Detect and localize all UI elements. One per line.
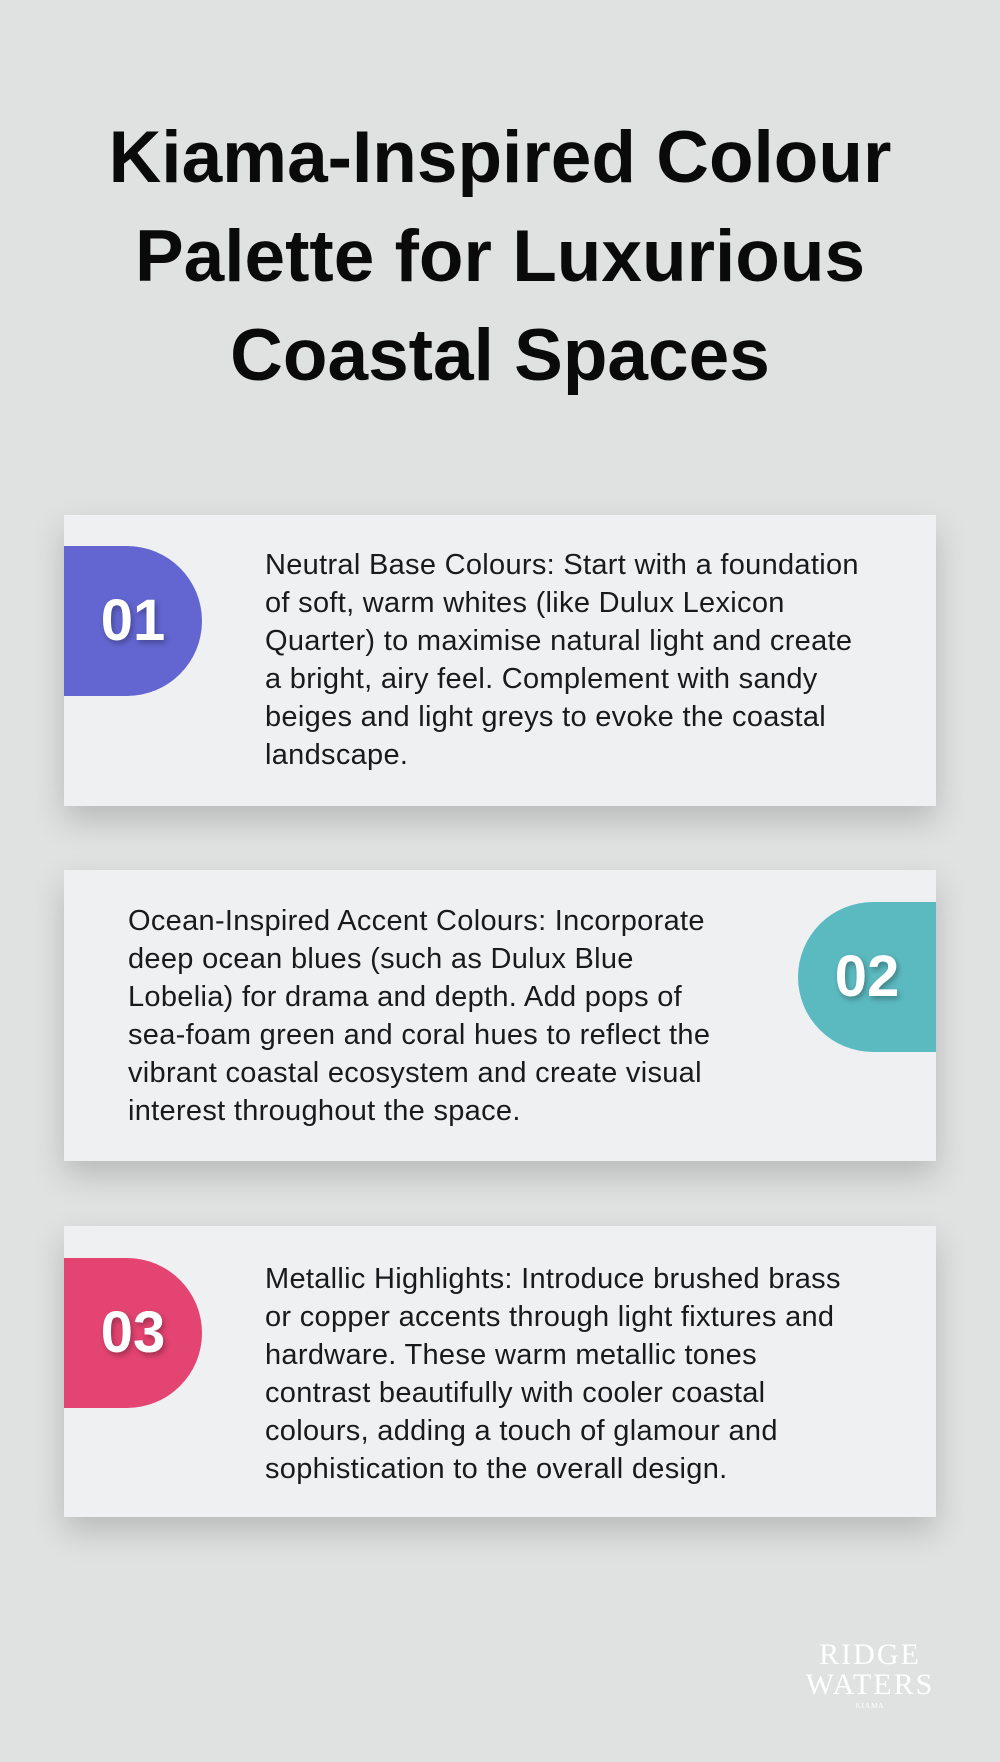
text block 1: of soft, warm whites (like Dulux Lexicon	[265, 587, 785, 619]
badge 01: 01	[101, 588, 165, 653]
title: Kiama-Inspired Colour	[109, 117, 891, 198]
text block 3: or copper accents through light fixtures and	[265, 1301, 834, 1333]
text block 2: interest throughout the space.	[128, 1095, 521, 1127]
badge 03	[64, 1258, 202, 1408]
badge 03: 03	[101, 1300, 165, 1365]
panel: card 1	[64, 515, 936, 806]
title: Palette for Luxurious	[135, 216, 865, 297]
badge 02: 02	[835, 944, 899, 1009]
text block 3	[265, 1263, 841, 1485]
text block 3: Metallic Highlights: Introduce brushed brass	[265, 1263, 841, 1295]
text block 3: sophistication to the overall design.	[265, 1453, 727, 1485]
text block 1: landscape.	[265, 739, 408, 771]
text block 2: Ocean-Inspired Accent Colours: Incorporate	[128, 905, 705, 937]
text block 1: a bright, airy feel. Complement with sandy	[265, 663, 818, 695]
text block 1: beiges and light greys to evoke the coastal	[265, 701, 826, 733]
title	[109, 117, 891, 396]
text block 3: hardware. These warm metallic tones	[265, 1339, 757, 1371]
title: Coastal Spaces	[230, 315, 770, 396]
text block 1: Neutral Base Colours: Start with a foundation	[265, 549, 859, 581]
text block 2	[128, 905, 710, 1127]
panel: card 2	[64, 870, 936, 1161]
text block 1	[265, 549, 859, 771]
text block 3: contrast beautifully with cooler coastal	[265, 1377, 765, 1409]
text block 1: Quarter) to maximise natural light and create	[265, 625, 852, 657]
badge 02	[798, 902, 936, 1052]
text block 2: vibrant coastal ecosystem and create visual	[128, 1057, 702, 1089]
logo: WATERS	[806, 1668, 934, 1701]
logo	[806, 1638, 934, 1710]
text block 2: Lobelia) for drama and depth. Add pops of	[128, 981, 682, 1013]
badge 01	[64, 546, 202, 696]
panel: card 3	[64, 1226, 936, 1517]
logo: RIDGE	[819, 1638, 921, 1671]
text block 2: deep ocean blues (such as Dulux Blue	[128, 943, 634, 975]
text block 2: sea-foam green and coral hues to reflect the	[128, 1019, 710, 1051]
text block 3: colours, adding a touch of glamour and	[265, 1415, 778, 1447]
logo: KIAMA	[856, 1702, 884, 1710]
